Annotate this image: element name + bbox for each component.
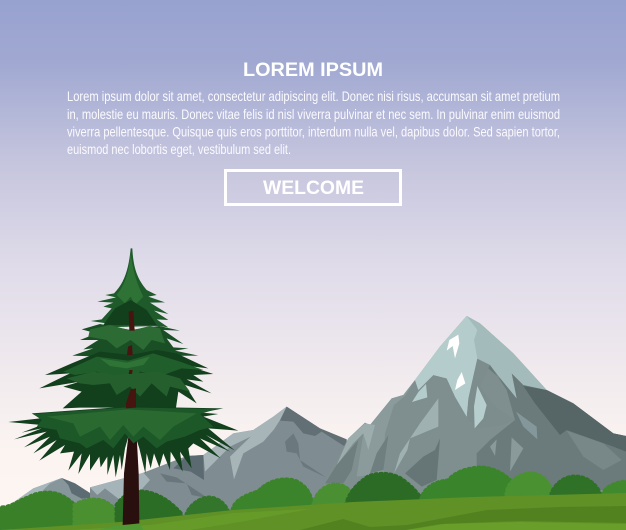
bush: center — [313, 484, 353, 515]
welcome button: WELCOME — [263, 178, 364, 199]
title: LOREM IPSUM — [243, 60, 383, 81]
snow upper — [415, 316, 547, 417]
body text: euismod nec lobortis eget, vestibulum sed elit. — [67, 141, 291, 157]
bush: light right — [506, 473, 552, 510]
bush: dark right — [551, 476, 600, 510]
bush: far right — [603, 481, 626, 510]
bottom tier — [8, 407, 238, 477]
pine tree — [8, 248, 238, 530]
bush: far left — [0, 492, 82, 530]
lit west face — [357, 380, 415, 477]
bush: behind trunk — [116, 491, 182, 525]
third tier — [39, 350, 213, 408]
main mountain — [320, 316, 626, 497]
small far mountain — [8, 478, 100, 530]
bushes — [0, 467, 626, 530]
snow patches — [447, 335, 459, 358]
upper trunk segments — [126, 311, 136, 408]
bush: center left — [232, 479, 312, 520]
trunk — [123, 437, 139, 525]
bush: center right — [421, 467, 526, 510]
ground — [0, 493, 626, 530]
bush: left second — [74, 499, 122, 530]
top tier — [91, 248, 168, 327]
bush: dark center — [346, 473, 422, 515]
middle mountain — [90, 407, 353, 527]
second tier — [72, 324, 198, 357]
grass at base — [100, 524, 143, 530]
east darker shoulder — [477, 358, 626, 490]
bush: small — [186, 497, 229, 525]
welcome button — [226, 170, 400, 204]
body text — [67, 88, 560, 157]
